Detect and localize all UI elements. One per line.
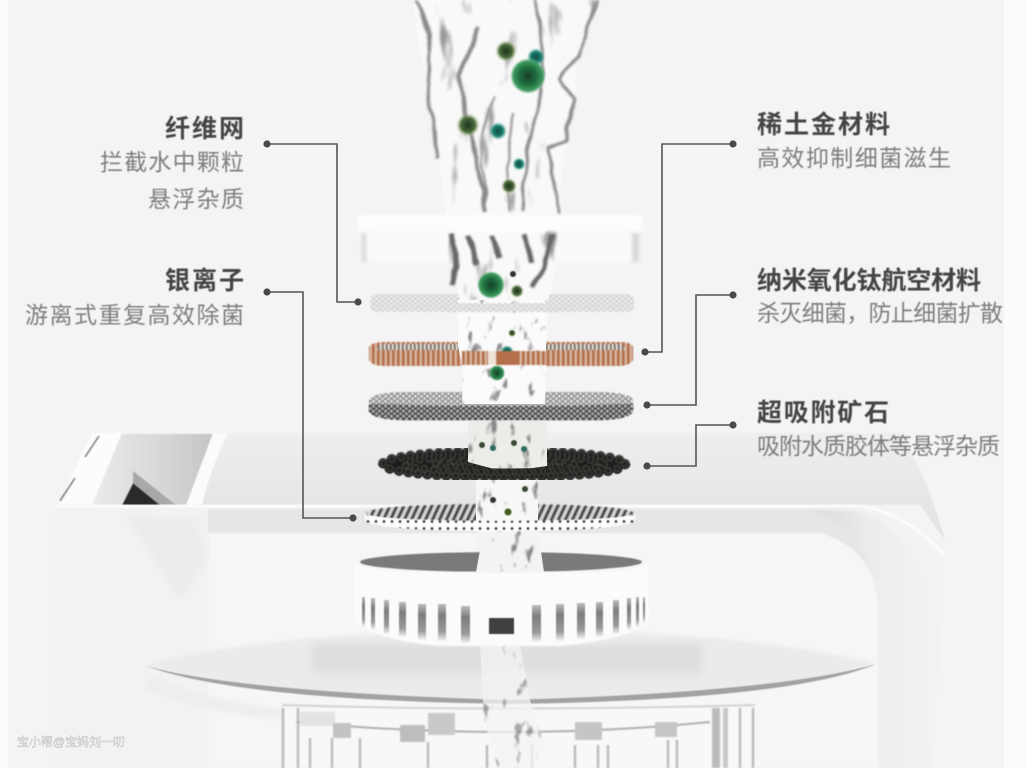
fibre mesh disc — [450, 303, 562, 312]
label: 纤维网: 悬浮杂质 — [148, 186, 244, 212]
water stream mid — [458, 300, 548, 404]
water streaks — [415, 0, 597, 288]
label: 银离子: 银离子 — [165, 267, 244, 295]
water stream lower — [468, 420, 547, 472]
label: 稀土金材料: 稀土金材料 — [757, 111, 890, 139]
filter top cover back — [362, 232, 639, 262]
line: 超吸附矿石 — [647, 425, 733, 466]
tank lower lip — [146, 672, 280, 720]
connector dots — [263, 140, 737, 522]
label: 银离子 — [25, 267, 244, 328]
label: 纤维网: 纤维网 — [165, 115, 244, 143]
base cup — [355, 562, 649, 646]
label: 稀土金材料: 高效抑制细菌滋生 — [757, 145, 951, 171]
lid tray — [58, 433, 945, 540]
tank dome — [146, 630, 876, 702]
connector lines — [267, 144, 733, 518]
line: 稀土金材料 — [645, 144, 733, 352]
water stream upper — [413, 0, 600, 300]
label: 超吸附矿石: 吸附水质胶体等悬浮杂质 — [757, 433, 1000, 459]
label: 超吸附矿石: 超吸附矿石 — [757, 399, 889, 427]
water column with bacteria — [413, 0, 600, 572]
base cup dark interior — [360, 552, 642, 572]
label: 超吸附矿石 — [757, 399, 1000, 459]
label: 纳米氧化钛航空材料: 纳米氧化钛航空材料 — [757, 267, 981, 295]
filter discs front — [358, 215, 642, 531]
label: 纳米氧化钛航空材料: 杀灭细菌，防止细菌扩散 — [757, 300, 1003, 326]
silver ion disc — [364, 514, 636, 531]
glass water tank — [146, 630, 876, 768]
watermark: 宝小帮@宝妈刘一叨 — [17, 735, 125, 749]
label: 纤维网 — [100, 115, 244, 212]
body shell — [55, 506, 945, 768]
line: 银离子 — [267, 292, 353, 518]
label: 纳米氧化钛航空材料 — [757, 267, 1003, 326]
water below filter — [480, 645, 545, 768]
tank rim — [146, 664, 876, 704]
adsorbent ore disc — [377, 464, 631, 480]
line: 纳米氧化钛 — [647, 295, 733, 405]
top cover — [358, 215, 642, 232]
appliance body — [55, 433, 945, 768]
filter holder — [282, 705, 755, 768]
line: 纤维网 — [267, 144, 360, 302]
label: 稀土金材料 — [757, 111, 951, 171]
holder block — [312, 644, 702, 674]
bacteria — [456, 40, 546, 516]
label: 纤维网: 拦截水中颗粒 — [100, 149, 244, 175]
disc backs — [366, 294, 634, 522]
titanium disc — [369, 404, 633, 420]
rare earth disc — [462, 351, 547, 365]
label: 银离子: 游离式重复高效除菌 — [25, 302, 244, 328]
